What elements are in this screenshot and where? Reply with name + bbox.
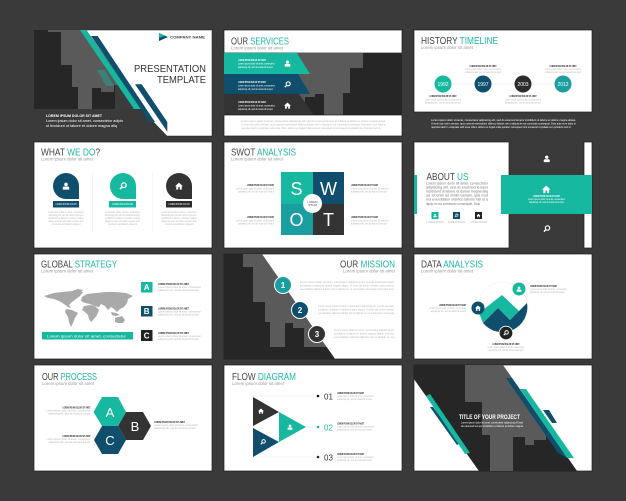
icon: person node — [512, 282, 526, 296]
flow title: FLOW DIAGRAM — [232, 371, 296, 383]
swot title: Lorem ipsum dolor sit amet — [231, 156, 284, 162]
company logo — [159, 33, 206, 41]
cover text: LOREM IPSUM DOLOR SIT AMET — [46, 114, 103, 118]
timeline label 1992: Lorem ipsum dolor sit amet, consectetur — [425, 98, 461, 102]
timeline caption: reprehenderit in voluptate velit esse cillum dolore eu fugiat nulla pariatur. Excepteur sint occaecat cupidatat non proident sunt in — [431, 125, 572, 129]
swot label top left: Lorem ipsum dolor sit amet, consectetur — [236, 188, 274, 190]
column: search: incididunt ut labore et dolore magna — [105, 217, 141, 220]
column: home: Lorem ipsum dolor sit amet, consectetur — [162, 211, 197, 214]
item A: LOREM IPSUM DOLOR SIT AMET — [158, 282, 189, 286]
icon: dark band person — [544, 156, 550, 162]
flow item 03: 03 — [324, 454, 333, 462]
timeline title: Lorem ipsum dolor sit amet — [421, 45, 474, 50]
column: home: aliqua ut enim ad minim veniam quis — [162, 220, 197, 223]
flow item 03: Lorem ipsum dolor sit amet, consectetur — [337, 456, 374, 459]
cover text — [46, 114, 123, 128]
item A: A — [144, 283, 150, 292]
panel: what we do — [34, 142, 212, 248]
column: search: aliqua ut enim ad minim veniam quis — [105, 220, 141, 223]
dark band text: LOREM IPSUM DOLOR SIT AMET — [238, 100, 266, 104]
process label A: LOREM IPSUM DOLOR SIT AMET — [62, 406, 91, 410]
flow item 01: Lorem ipsum dolor sit amet, consectetur — [337, 395, 374, 398]
timeline node 1997 — [474, 76, 492, 92]
project title: TITLE OF YOUR PROJECT — [459, 414, 520, 421]
panel: data analysis — [414, 254, 592, 359]
data label right: adipiscing elit, sed do eiusmod tempor — [530, 291, 565, 294]
teal band: Lorem ipsum dolor sit amet, consectetur — [238, 62, 275, 66]
flow item 01: adipiscing elit, sed do eiusmod tempor — [337, 398, 372, 401]
teal caption bar — [42, 332, 133, 340]
data title: DATA ANALYSIS — [421, 258, 483, 270]
flow item 01: 01 — [324, 392, 333, 402]
about teal band: LOREM IPSUM DOLOR SIT AMET — [533, 194, 560, 198]
about teal band: adipiscing elit, sed do eiusmod tempor — [529, 200, 564, 204]
column: search: Lorem ipsum dolor sit amet, consectetur — [105, 211, 140, 214]
step 2: 2 — [298, 306, 303, 315]
panel: presentation template cover — [34, 30, 212, 136]
process title — [42, 371, 97, 386]
strategy title: GLOBAL STRATEGY — [41, 258, 117, 270]
step 3 — [308, 326, 395, 342]
dark band text — [238, 100, 291, 111]
data label bottom: LOREM IPSUM DOLOR SIT AMET — [492, 342, 520, 346]
flow item 03: adipiscing elit, sed do eiusmod tempor — [337, 459, 372, 462]
about title: ABOUT US — [426, 171, 468, 183]
world map — [44, 289, 133, 327]
about body text: incididunt ut labore et dolore magna aliq — [426, 190, 488, 194]
swot grid: T — [323, 210, 334, 230]
swot label bottom right — [351, 215, 389, 226]
timeline title: HISTORY TIMELINE — [421, 35, 498, 47]
column: person: incididunt ut labore et dolore magna — [48, 217, 84, 220]
timeline label 2003: LOREM IPSUM DOLOR SIT AMET — [510, 94, 537, 98]
swot label bottom right: LOREM IPSUM DOLOR SIT AMET — [351, 215, 378, 219]
swot grid: W — [320, 179, 337, 199]
timeline label 1992: adipiscing elit, sed do eiusmod tempor — [425, 102, 461, 104]
flow item 01 — [317, 391, 374, 402]
services title: OUR SERVICES — [231, 36, 289, 48]
triangle teal — [279, 412, 306, 442]
process label A — [46, 406, 91, 416]
services footer — [224, 115, 402, 136]
hexagon A — [94, 397, 126, 426]
step 3: incididunt ut labore et dolore magna aliqua. Ut enim — [334, 332, 394, 336]
data label right: Lorem ipsum dolor sit amet, consectetur — [530, 288, 567, 291]
item B: Lorem ipsum dolor sit amet, consectetur — [158, 310, 201, 314]
data title: Lorem ipsum dolor sit amet — [421, 268, 474, 274]
swot label bottom left — [236, 215, 274, 226]
step 2: incididunt ut labore et dolore magna aliqua. Ut enim ad minim veniam — [318, 308, 394, 312]
column: home: LOREM IPSUM DOLOR — [168, 202, 190, 206]
panel: swot analysis — [224, 142, 402, 248]
swot grid: O — [289, 210, 304, 230]
data label right: LOREM IPSUM DOLOR SIT AMET — [530, 284, 557, 288]
step 1: incididunt ut labore et dolore magna aliqua. Ut enim ad minim veniam, quis nostrud — [300, 284, 395, 288]
strategy title: Lorem ipsum dolor sit amet — [41, 268, 94, 274]
icon: search node — [499, 326, 513, 340]
step 3: 3 — [315, 330, 320, 339]
navy stripes — [91, 36, 167, 132]
about teal band — [501, 175, 592, 214]
item A: adipiscing elit, sed do eiusmod tempor — [158, 289, 199, 292]
about body text: rud exercitation ullamco laboris nisi ut a — [426, 198, 488, 202]
what we do title: Lorem ipsum dolor sit amet — [41, 156, 94, 162]
project title: do eiusmod tempor incididunt ut labore et dolore magna — [461, 424, 524, 428]
about body text: ua. Ut enim ad minim veniam, quis nost — [426, 194, 488, 198]
timeline node 1997: 1997 — [477, 82, 489, 88]
hexagon A: A — [106, 405, 115, 420]
dark band text: adipiscing elit, sed do eiusmod tempor — [238, 107, 273, 111]
item A: Lorem ipsum dolor sit amet, consectetur — [158, 286, 201, 289]
mission title: OUR MISSION — [340, 258, 395, 270]
cover title: PRESENTATION — [134, 63, 206, 75]
step 2: exercitation ullamco laboris nisi ut aliquip ex ea commodo consequat — [318, 312, 394, 315]
timeline label 2012: Lorem ipsum dolor sit amet, consectetur — [545, 68, 581, 71]
item B: adipiscing elit, sed do eiusmod tempor — [158, 314, 199, 316]
flow item 03: LOREM IPSUM DOLOR SIT AMET — [337, 452, 364, 456]
services footer: Ut enim ad minim veniam, quis nostrud exercitation ullamco laboris nisi ut aliquip ex ea commodo consequat. Duis aute irure dolor in — [241, 124, 387, 126]
step 3: exercitation ullamco laboris nisi ut aliquip ex ea — [334, 336, 395, 339]
column: person: LOREM IPSUM DOLOR — [56, 202, 77, 206]
timeline label 1997: adipiscing elit, sed do eiusmod tempor — [465, 71, 501, 74]
column: search: adipiscing elit, sed do eiusmod tempor — [105, 214, 140, 217]
icon: home node — [472, 302, 484, 314]
teal band: LOREM IPSUM DOLOR SIT AMET — [238, 58, 266, 62]
process label A: adipiscing elit, sed do eiusmod tempor — [48, 412, 91, 416]
process label C: adipiscing elit, sed do eiusmod tempor — [48, 441, 91, 444]
dark band text: Lorem ipsum dolor sit amet, consectetur — [238, 104, 275, 108]
timeline node 1992 — [434, 76, 452, 92]
process label B — [154, 420, 198, 430]
about small icons: LOREM IPSUM — [426, 221, 444, 224]
left navy stripe — [430, 407, 460, 445]
item C: Lorem ipsum dolor sit amet, consectetur — [158, 335, 201, 338]
step 1: exercitation ullamco laboris nisi ut aliquip ex ea commodo consequat. Duis aute irure — [300, 288, 395, 291]
column: home — [162, 173, 197, 226]
column: person: nostrud exercitation ullamco — [52, 223, 81, 226]
step 1: Lorem ipsum dolor sit amet, consectetur adipiscing elit, sed do eiusmod tempor — [300, 281, 394, 284]
process label B: LOREM IPSUM DOLOR SIT AMET — [154, 420, 185, 424]
process label B: adipiscing elit, sed do eiusmod tempor — [154, 427, 196, 430]
swot label top left: adipiscing elit, sed do eiusmod tempor — [238, 190, 274, 194]
timeline node 2012 — [554, 76, 572, 92]
timeline label 2003 — [505, 94, 541, 104]
what we do title: WHAT WE DO? — [41, 146, 100, 158]
about small icons: LOREM IPSUM — [448, 221, 465, 224]
white diagonal area — [86, 30, 212, 136]
about teal band: Lorem ipsum dolor sit amet, consectetur — [528, 197, 565, 201]
services title — [231, 36, 289, 50]
swot label top left — [236, 183, 274, 194]
timeline node 1992: 1992 — [437, 82, 449, 88]
item C: LOREM IPSUM DOLOR SIT AMET — [158, 331, 189, 335]
triangle dark — [253, 397, 279, 426]
about small icons — [426, 212, 487, 224]
timeline label 2012: LOREM IPSUM DOLOR SIT AMET — [550, 64, 577, 68]
mission photo — [224, 254, 340, 359]
navy band: Lorem ipsum dolor sit amet, consectetur — [238, 84, 275, 88]
hexagon B: B — [131, 419, 139, 434]
data label left: adipiscing elit, sed do eiusmod tempor — [431, 310, 466, 313]
navy band: adipiscing elit, sed do eiusmod tempor — [238, 87, 273, 91]
timeline label 1997 — [465, 64, 501, 74]
step 2 — [292, 302, 395, 318]
cover text: Lorem ipsum dolor sit amet, consectetur adipis — [46, 119, 123, 123]
panel: our mission — [224, 254, 402, 359]
circular mountain chart — [478, 282, 528, 332]
data label bottom: Lorem ipsum dolor sit amet, consectetur — [488, 346, 525, 349]
swot label bottom right: adipiscing elit, sed do eiusmod tempor — [351, 222, 387, 226]
timeline node 2003: 2003 — [517, 82, 529, 88]
swot label top right — [351, 183, 389, 194]
mission title: Lorem ipsum dolor sit amet — [343, 268, 396, 274]
right navy stripe — [506, 378, 567, 458]
column: search — [105, 173, 141, 226]
data label bottom — [488, 342, 525, 352]
item C — [141, 330, 201, 341]
cover text: ut tincidunt ut labore et dolore magna aliq — [46, 124, 117, 128]
swot label top right: adipiscing elit, sed do eiusmod tempor — [351, 190, 387, 194]
flow item 02: 02 — [324, 424, 333, 432]
panel: our services — [224, 30, 402, 136]
project photo — [414, 365, 584, 471]
panel: title of your project — [414, 365, 592, 471]
swot grid: S — [290, 179, 303, 199]
cover photo — [34, 30, 144, 109]
right teal stripe — [520, 389, 574, 458]
data label left: LOREM IPSUM DOLOR SIT AMET — [439, 303, 466, 307]
process label C — [46, 434, 91, 444]
flow title: Lorem ipsum dolor sit amet — [232, 381, 285, 386]
flow item 03 — [317, 452, 374, 462]
step 1: 1 — [281, 281, 286, 290]
swot label top right: Lorem ipsum dolor sit amet, consectetur — [351, 188, 389, 190]
timeline node 2003 — [514, 76, 532, 92]
flow item 01: LOREM IPSUM DOLOR SIT AMET — [337, 391, 364, 395]
services footer: Lorem ipsum dolor sit amet, consectetur adipiscing elit, sed do eiusmod tempor incididunt ut labore et dolore magna aliqua. — [241, 120, 386, 123]
timeline label 2003: adipiscing elit, sed do eiusmod tempor — [505, 102, 541, 104]
data label right — [530, 284, 567, 294]
process label C: LOREM IPSUM DOLOR SIT AMET — [62, 434, 91, 438]
timeline label 2003: Lorem ipsum dolor sit amet, consectetur — [505, 98, 541, 102]
timeline node 2012: 2012 — [557, 82, 569, 88]
column: person: aliqua ut enim ad minim veniam quis — [48, 220, 84, 223]
column: person: adipiscing elit, sed do eiusmod tempor — [48, 214, 84, 217]
cover title — [134, 63, 206, 86]
swot label top right: LOREM IPSUM DOLOR SIT AMET — [351, 183, 378, 187]
process title: Lorem ipsum dolor sit amet — [42, 381, 95, 386]
services footer: reprehenderit in voluptate velit esse cillum dolore eu fugiat nulla pariatur. Excepteur sint occaecat cupidatat non proident sunt in — [241, 127, 382, 130]
triangle navy — [253, 428, 279, 457]
column: person — [48, 173, 84, 226]
flow item 02 — [317, 422, 374, 432]
teal stripe — [80, 30, 141, 109]
column: search: nostrud exercitation ullamco — [108, 223, 138, 226]
panel: history timeline — [414, 30, 592, 112]
timeline label 2012: adipiscing elit, sed do eiusmod tempor — [545, 71, 581, 74]
hexagon B — [118, 412, 151, 440]
navy band: LOREM IPSUM DOLOR SIT AMET — [238, 80, 266, 84]
timeline caption — [431, 118, 577, 129]
services photo — [290, 53, 402, 115]
timeline label 1992 — [425, 94, 461, 104]
swot label bottom right: Lorem ipsum dolor sit amet, consectetur — [351, 220, 389, 222]
cover title: TEMPLATE — [157, 74, 206, 86]
swot label top left: LOREM IPSUM DOLOR SIT AMET — [247, 183, 274, 187]
hexagon C — [94, 426, 126, 454]
step 2: Lorem ipsum dolor sit amet, consectetur adipiscing elit, sed do eiusmod — [318, 305, 395, 308]
flow item 02: Lorem ipsum dolor sit amet, consectetur — [337, 426, 374, 428]
column: home: incididunt ut labore et dolore magna — [162, 217, 197, 220]
navy band — [224, 74, 310, 94]
swot label bottom left: Lorem ipsum dolor sit amet, consectetur — [236, 220, 274, 222]
column: home: nostrud exercitation ullamco — [164, 223, 194, 226]
process label A: Lorem ipsum dolor sit amet, consectetur — [46, 410, 91, 412]
column: person: Lorem ipsum dolor sit amet, consectetur — [48, 211, 84, 214]
dark band — [224, 94, 314, 115]
company logo: COMPANY NAME — [170, 36, 206, 40]
data label bottom: adipiscing elit, sed do eiusmod tempor — [488, 349, 524, 352]
panel: flow diagram — [224, 365, 402, 471]
item B — [141, 306, 201, 316]
about body text — [426, 182, 489, 206]
project title: Lorem ipsum dolor sit amet, consectetur adipiscing elit sed — [461, 420, 524, 424]
column: search: LOREM IPSUM DOLOR — [112, 202, 133, 206]
about body text: adipiscing elit, sed do eiusmod tempor — [426, 186, 489, 190]
swot label bottom left: adipiscing elit, sed do eiusmod tempor — [238, 222, 274, 226]
timeline caption: Lorem ipsum dolor sit amet, consectetur adipiscing elit, sed do eiusmod tempor incididunt ut labore et dolore magna aliqua. — [431, 118, 576, 122]
process title: OUR PROCESS — [42, 371, 97, 383]
left teal stripe — [426, 394, 470, 454]
process label B: Lorem ipsum dolor sit amet, consectetur — [154, 424, 198, 427]
flow item 02: adipiscing elit, sed do eiusmod tempor — [337, 428, 372, 432]
small navy stripe — [543, 410, 557, 423]
process label C: Lorem ipsum dolor sit amet, consectetur — [46, 438, 91, 441]
item B: B — [144, 307, 150, 316]
timeline label 1997: LOREM IPSUM DOLOR SIT AMET — [470, 64, 497, 68]
timeline label 1992: LOREM IPSUM DOLOR SIT AMET — [430, 94, 457, 98]
services title: Lorem ipsum dolor sit amet — [231, 46, 284, 50]
item C: C — [144, 332, 150, 340]
swot grid: LOREM — [308, 200, 318, 204]
swot label bottom left: LOREM IPSUM DOLOR SIT AMET — [247, 215, 274, 219]
about body text: Lorem ipsum dolor sit amet, consectetur — [426, 182, 489, 186]
data label left — [429, 303, 466, 313]
item A — [141, 282, 201, 292]
timeline caption: Ut enim ad minim veniam, quis nostrud exercitation ullamco laboris nisi ut aliquip ex ea commodo consequat. Duis aute irure dolor in — [431, 122, 577, 126]
project title — [459, 414, 524, 428]
panel: our process — [34, 365, 212, 471]
icon: dark band search — [544, 226, 550, 232]
panel: global strategy — [34, 254, 212, 359]
item B: LOREM IPSUM DOLOR SIT AMET — [158, 306, 189, 310]
teal band — [224, 53, 310, 74]
teal caption bar: Lorem ipsum dolor sit amet, consectetur — [47, 334, 127, 338]
data label left: Lorem ipsum dolor sit amet, consectetur — [429, 307, 466, 310]
swot grid — [281, 172, 344, 235]
swot title: SWOT ANALYSIS — [231, 146, 296, 158]
step 3: Lorem ipsum dolor sit amet, consectetur adipiscing elit — [334, 329, 394, 332]
teal band: adipiscing elit, sed do eiusmod tempor — [238, 65, 273, 69]
item C: adipiscing elit, sed do eiusmod tempor — [158, 338, 199, 341]
timeline label 1997: Lorem ipsum dolor sit amet, consectetur — [465, 68, 501, 71]
about body text: liquip ex ea commodo consequat. Duis — [426, 202, 480, 206]
panel: about us — [414, 142, 592, 248]
about small icons: LOREM IPSUM — [470, 221, 487, 224]
column: home: adipiscing elit, sed do eiusmod tempor — [162, 214, 197, 217]
timeline label 2012 — [545, 64, 581, 74]
swot grid: IPSUM — [308, 203, 318, 207]
hexagon C: C — [105, 433, 115, 448]
step 1 — [274, 276, 395, 294]
flow item 02: LOREM IPSUM DOLOR SIT AMET — [337, 422, 364, 426]
